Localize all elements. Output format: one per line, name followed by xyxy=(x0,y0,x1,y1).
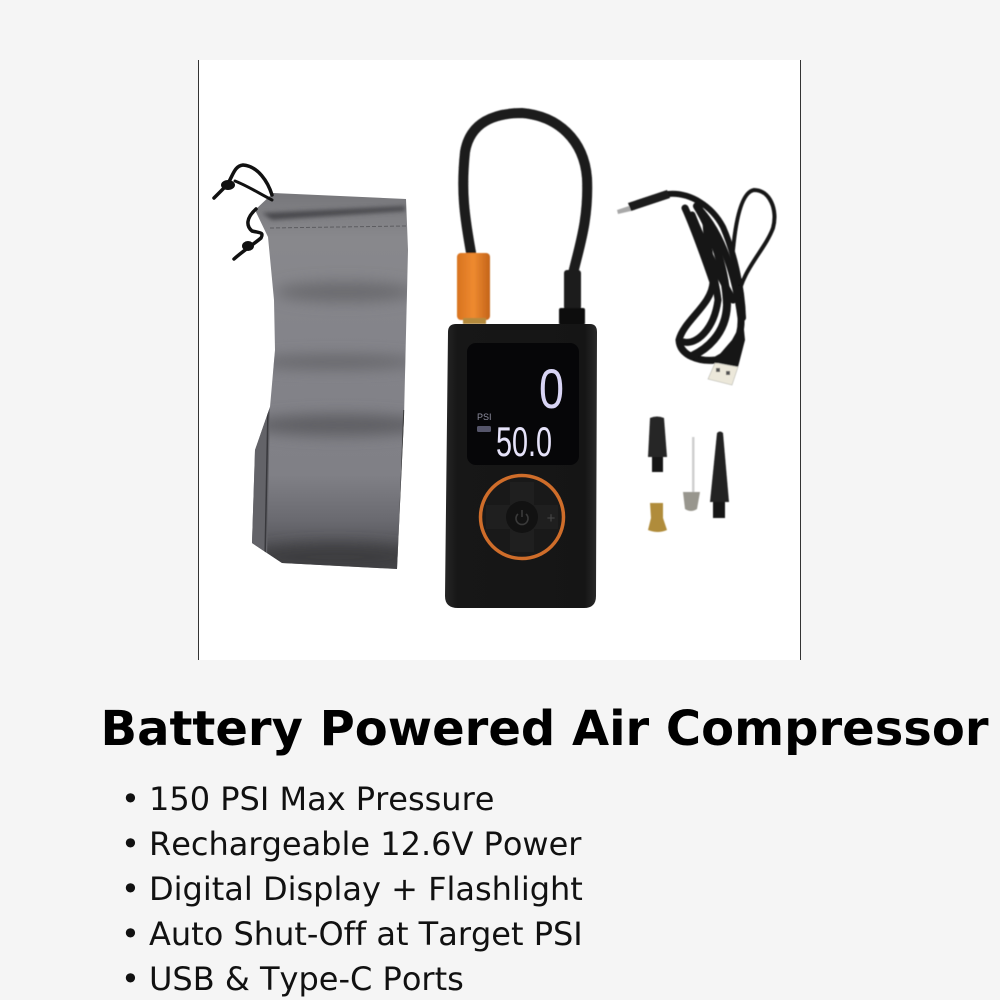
product photo panel xyxy=(198,60,801,660)
feature list: USB & Type-C Ports xyxy=(149,960,464,998)
control pad xyxy=(480,476,564,558)
icons: valve adapters xyxy=(648,416,729,532)
adapter: short cone xyxy=(648,416,667,457)
reading: target pressure: 50.0 xyxy=(496,418,552,465)
feature list: Auto Shut-Off at Target PSI xyxy=(149,915,583,953)
feature list: Digital Display + Flashlight xyxy=(149,870,583,908)
icon: storage pouch xyxy=(214,165,430,571)
adapter: needle xyxy=(692,437,694,493)
feature list: • xyxy=(121,915,140,953)
title: Battery Powered Air Compressor xyxy=(100,701,989,757)
feature list: • xyxy=(121,780,140,818)
LCD screen xyxy=(467,343,579,465)
feature list: • xyxy=(121,870,140,908)
feature list xyxy=(121,780,583,998)
icon: orange hose nut xyxy=(457,253,490,320)
icon: USB cable xyxy=(617,190,774,385)
adapter: long cone xyxy=(710,432,729,502)
feature list: • xyxy=(121,960,140,998)
icon: battery xyxy=(477,426,491,432)
feature list: 150 PSI Max Pressure xyxy=(149,780,494,818)
icon: flexible air hose xyxy=(457,113,587,325)
reading: PSI label: PSI xyxy=(477,412,492,422)
icon: compressor body xyxy=(445,324,597,608)
white photo background xyxy=(198,60,801,660)
feature list: Rechargeable 12.6V Power xyxy=(149,825,581,863)
adapter: brass valve xyxy=(648,503,667,532)
Type-C plug xyxy=(628,190,670,211)
reading: current pressure: 0 xyxy=(539,357,564,420)
button: plus: + xyxy=(547,510,556,527)
pouch drawstring xyxy=(214,165,272,259)
USB-A plug xyxy=(713,320,745,367)
feature list: • xyxy=(121,825,140,863)
